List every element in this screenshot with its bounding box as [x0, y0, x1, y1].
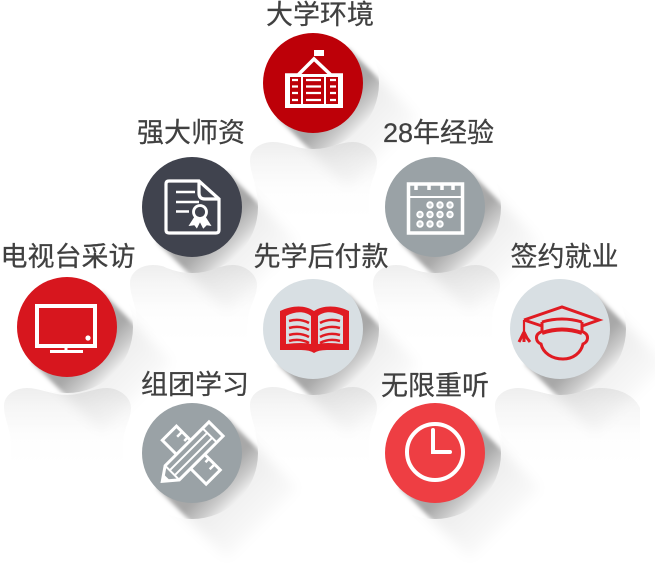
- gray blob: lower left: [4, 388, 131, 485]
- icon: television: [37, 306, 95, 352]
- icon: clock: [407, 424, 463, 480]
- label: 先学后付款: [254, 242, 388, 272]
- icon: graduate with cap: [519, 307, 599, 359]
- icon: open book: [280, 306, 349, 353]
- icon: calendar: [408, 183, 462, 233]
- gray blob: right middle: [373, 265, 500, 397]
- panel: 大学环境: [263, 0, 379, 149]
- label: 电视台采访: [0, 242, 136, 272]
- panel: 28年经验: [369, 118, 530, 302]
- panel: 无限重听: [382, 372, 501, 519]
- gray blob: center upper: [250, 142, 377, 274]
- label: 签约就业: [510, 242, 618, 272]
- panel: 电视台采访: [0, 242, 162, 422]
- gray blob: left middle: [130, 265, 257, 397]
- label: 28年经验: [383, 118, 494, 148]
- panel: 组团学习: [126, 370, 287, 548]
- icon: certificate: [166, 181, 219, 233]
- panel: 先学后付款: [254, 242, 388, 395]
- gray blob: lower center: [250, 387, 377, 494]
- icon: school building: [285, 50, 343, 108]
- label: 强大师资: [137, 118, 245, 148]
- label: 组团学习: [141, 370, 249, 400]
- label: 无限重听: [381, 371, 489, 401]
- panel: 签约就业: [494, 242, 655, 424]
- gray blob: lower right: [495, 388, 640, 485]
- icon: ruler and pencil: [156, 422, 223, 489]
- panel: 强大师资: [138, 118, 258, 273]
- label: 大学环境: [266, 0, 374, 30]
